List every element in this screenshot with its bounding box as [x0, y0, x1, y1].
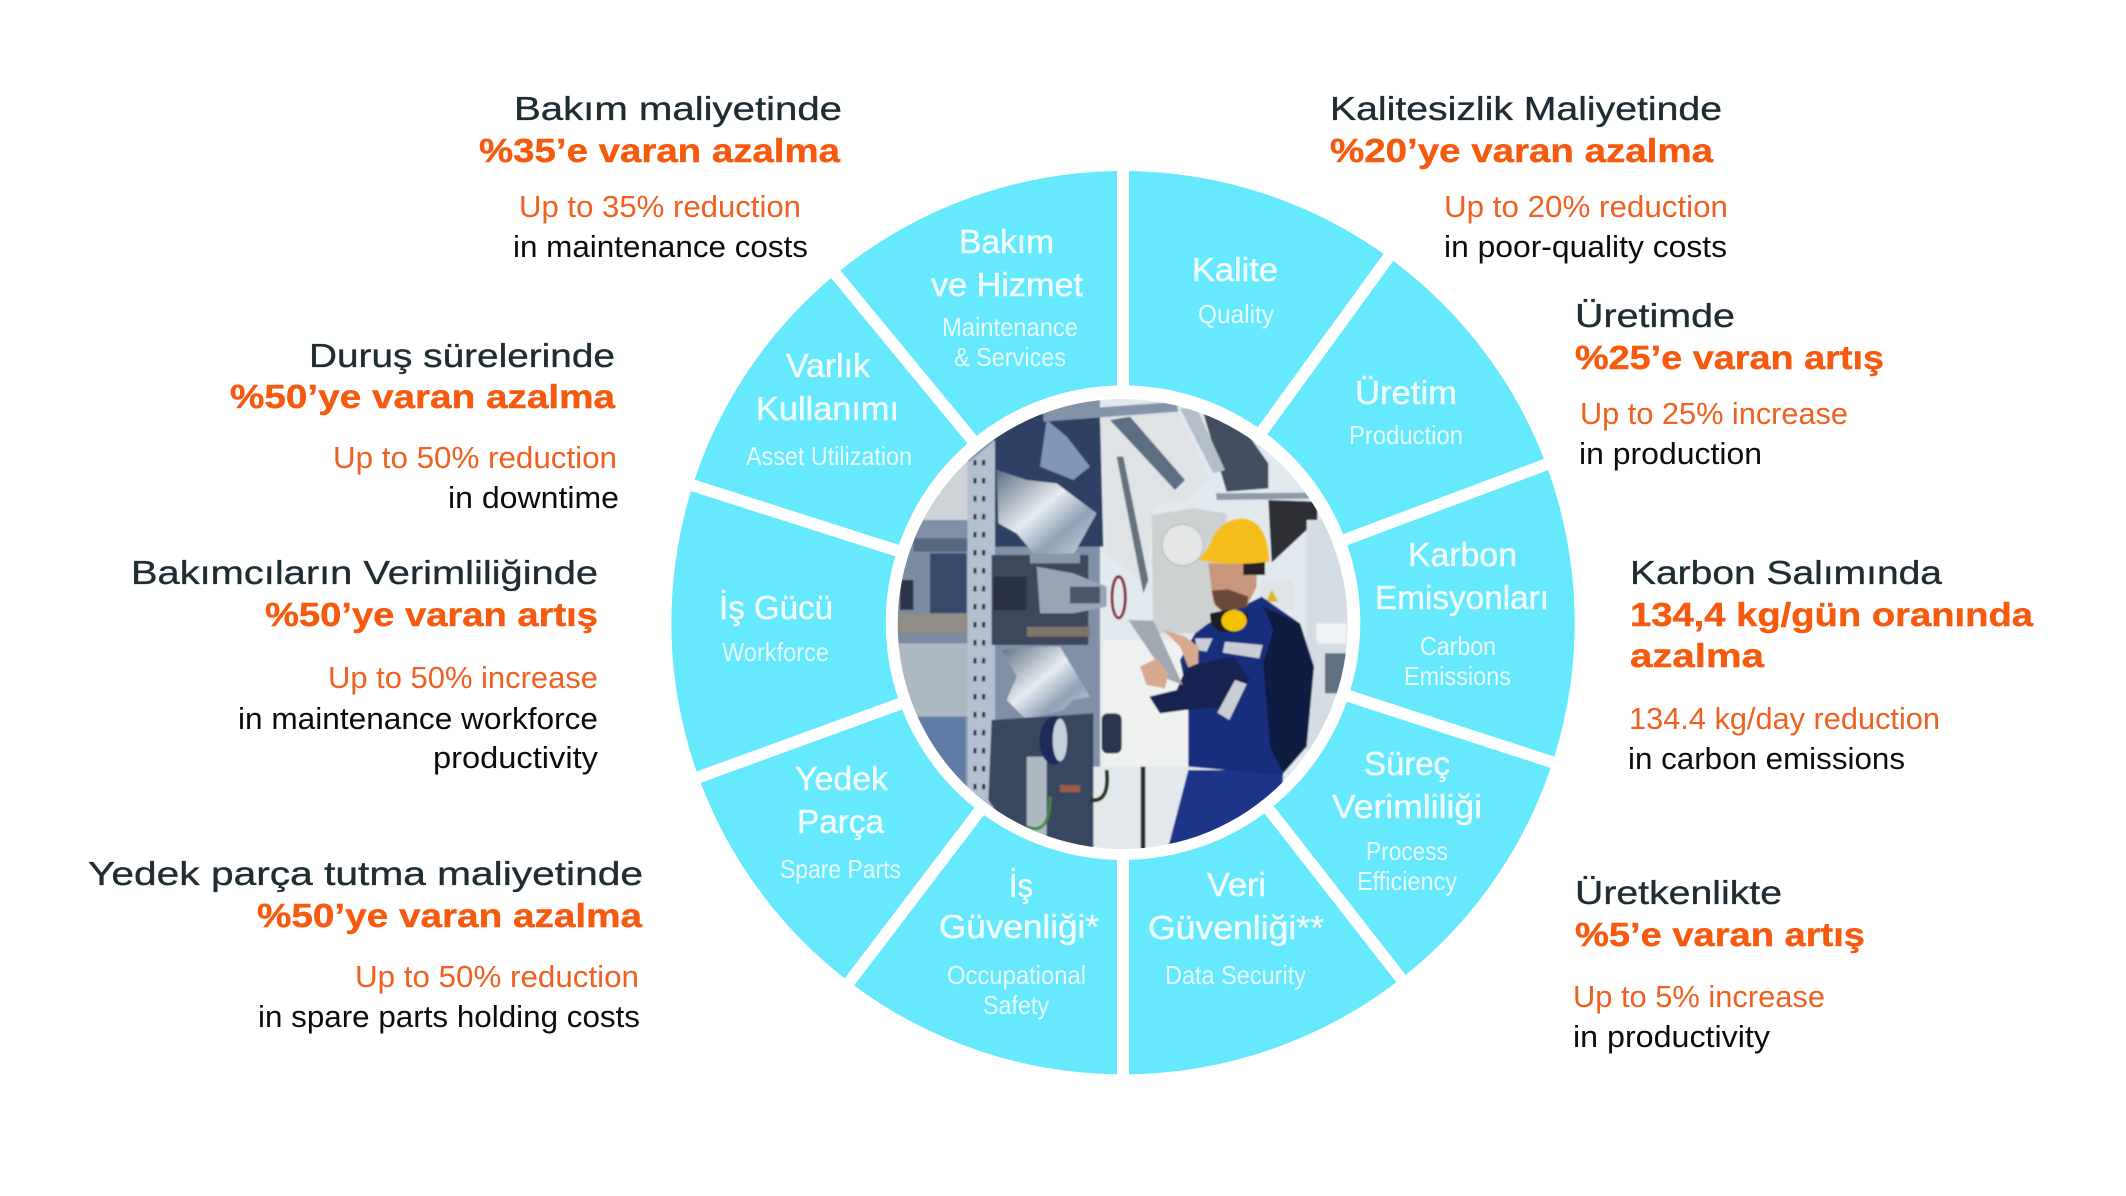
segment: Karbon Emisyonları: Emissions [1404, 661, 1511, 691]
text block: maintenance cost: Bakım maliyetinde [514, 90, 842, 127]
text block: spare parts [88, 855, 643, 1034]
segment: Süreç Verimliliği: Process [1366, 836, 1448, 866]
segment: Yedek Parça: Yedek [795, 760, 889, 797]
segment: Varlık Kullanımı: Varlık [786, 347, 871, 384]
text block: workforce productivity: Up to 50% increase [328, 660, 598, 695]
segment: İş Gücü: İş Gücü [719, 589, 833, 626]
hands [1140, 658, 1168, 688]
segment: Karbon Emisyonları: Karbon [1408, 536, 1517, 573]
lower piping and gauges [988, 713, 1145, 850]
segment: Karbon Emisyonları: Carbon [1420, 631, 1496, 661]
segment: İş Güvenliği: Güvenliği* [939, 908, 1099, 945]
text block: spare parts: Yedek parça tutma maliyetinde [88, 855, 643, 892]
text block: production: in production [1579, 436, 1762, 471]
segment: Süreç Verimliliği: Efficiency [1357, 866, 1457, 896]
text block: maintenance cost: in maintenance costs [513, 229, 808, 264]
segment: Yedek Parça: Parça [797, 803, 885, 840]
segment: Bakım ve Hizmet: Maintenance [942, 312, 1078, 342]
segment: Karbon Emisyonları: Emisyonları [1375, 579, 1549, 616]
text block: downtime: in downtime [448, 480, 619, 515]
perforated rail [967, 440, 995, 810]
text block: workforce productivity: %50’ye varan artış [265, 596, 598, 633]
text block: carbon emissions [1628, 554, 2034, 776]
torso [1180, 597, 1314, 775]
photo: engineer with tablet at industrial plant [893, 397, 1353, 853]
segment: İş Güvenliği: Occupational [947, 960, 1086, 990]
segment: İş Güvenliği: İş [1009, 867, 1033, 904]
segment: Varlık Kullanımı [695, 278, 967, 545]
text block: poor quality cost: Up to 20% reduction [1444, 189, 1728, 224]
segment: Üretim: Üretim [1355, 374, 1457, 411]
text block: carbon emissions: azalma [1630, 637, 1765, 674]
text block: maintenance cost [479, 90, 842, 264]
valve assembly [992, 553, 1125, 645]
left equipment block [897, 538, 970, 790]
text block: carbon emissions: in carbon emissions [1628, 741, 1905, 776]
silver duct elbows [997, 470, 1097, 720]
segment: Süreç Verimliliği: Verimliliği [1332, 788, 1482, 825]
segment: Bakım ve Hizmet: & Services [954, 342, 1066, 372]
segment: Varlık Kullanımı: Kullanımı [756, 390, 899, 427]
text block: poor quality cost: %20’ye varan azalma [1330, 132, 1714, 169]
segment: Yedek Parça: Spare Parts [780, 854, 901, 884]
segment: İş Gücü: Workforce [722, 637, 829, 667]
arm [1149, 657, 1250, 713]
text block: workforce productivity: in maintenance workforce [238, 701, 598, 736]
segment: Üretim [1267, 261, 1544, 534]
text block: productivity: in productivity [1573, 1019, 1771, 1054]
text block: carbon emissions: Karbon Salımında [1630, 554, 1943, 591]
segment: Kalite [1129, 171, 1384, 427]
segment: Bakım ve Hizmet: ve Hizmet [931, 266, 1083, 303]
tablet [1128, 620, 1183, 685]
text block: production [1575, 297, 1884, 471]
text block: production: %25’e varan artış [1575, 339, 1884, 376]
text block: spare parts: %50’ye varan azalma [257, 897, 643, 934]
text block: downtime [230, 337, 619, 515]
text block: downtime: Up to 50% reduction [333, 440, 617, 475]
ear protection [1210, 610, 1248, 632]
text block: downtime: %50’ye varan azalma [230, 378, 616, 415]
segment: Veri Güvenliği: Data Security [1165, 960, 1306, 990]
text block: workforce productivity: Bakımcıların Verimliliğinde [131, 554, 598, 591]
text block: carbon emissions: 134.4 kg/day reduction [1629, 701, 1940, 736]
segment: Veri Güvenliği: Veri [1207, 866, 1266, 903]
segment: Üretim: Production [1349, 420, 1463, 450]
segment: Kalite: Quality [1198, 299, 1274, 329]
segment: Süreç Verimliliği [1274, 702, 1551, 975]
text block: workforce productivity: productivity [433, 740, 599, 775]
segment: Veri Güvenliği [1129, 813, 1396, 1074]
text block: poor quality cost [1330, 90, 1728, 264]
text block: poor quality cost: in poor-quality costs [1444, 229, 1727, 264]
reflective strips [1223, 642, 1263, 658]
segment: Karbon Emisyonları [1347, 470, 1575, 757]
text block: maintenance cost: Up to 35% reduction [519, 189, 801, 224]
text block: productivity: %5’e varan artış [1575, 916, 1865, 953]
text block: production: Up to 25% increase [1580, 396, 1848, 431]
text block: productivity: Üretkenlikte [1575, 874, 1782, 911]
helmet [1197, 518, 1269, 564]
segment: Yedek Parça [701, 709, 974, 978]
segment: Bakım ve Hizmet: Bakım [959, 223, 1054, 260]
text block: workforce productivity [131, 554, 599, 775]
text block: poor quality cost: Kalitesizlik Maliyetinde [1330, 90, 1722, 127]
text block: maintenance cost: %35’e varan azalma [479, 132, 841, 169]
segment: Kalite: Kalite [1192, 251, 1278, 288]
segment: Süreç Verimliliği: Süreç [1364, 745, 1450, 782]
text block: production: Üretimde [1575, 297, 1735, 334]
text block: spare parts: in spare parts holding costs [258, 999, 640, 1034]
text block: productivity [1573, 874, 1865, 1054]
segment: İş Gücü [671, 491, 898, 772]
segment: İş Güvenliği: Safety [983, 990, 1049, 1020]
text block: productivity: Up to 5% increase [1573, 979, 1825, 1014]
text block: downtime: Duruş sürelerinde [309, 337, 615, 374]
infographic canvas [88, 96, 2034, 1074]
segment: İş Güvenliği [854, 815, 1117, 1074]
head [1208, 563, 1257, 612]
legs [1168, 770, 1283, 847]
text block: spare parts: Up to 50% reduction [355, 959, 639, 994]
segment: Veri Güvenliği: Güvenliği** [1148, 909, 1324, 946]
segment: Bakım ve Hizmet [840, 171, 1117, 436]
text block: carbon emissions: 134,4 kg/gün oranında [1630, 596, 2034, 633]
segment: Varlık Kullanımı: Asset Utilization [746, 441, 912, 471]
worker [1128, 518, 1314, 847]
